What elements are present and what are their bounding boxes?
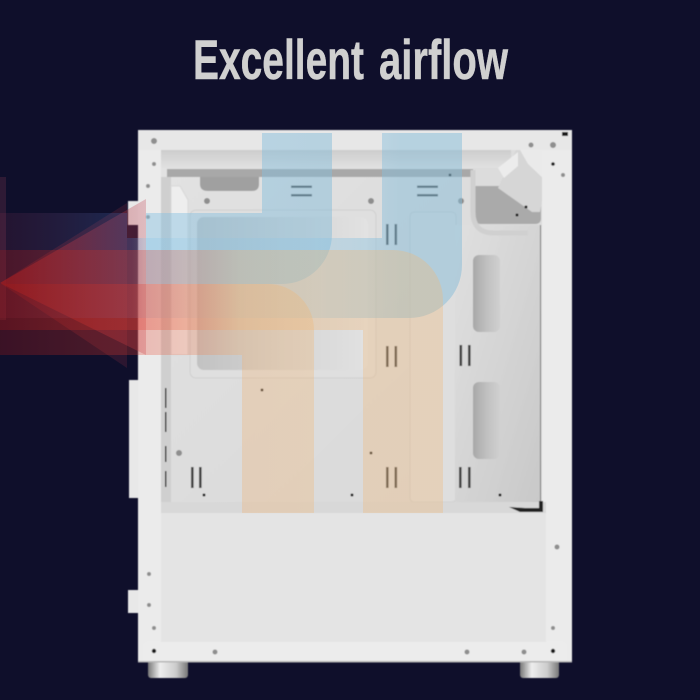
psu shroud: [161, 513, 546, 642]
airflow: blue top-right duct: [0, 133, 462, 318]
raised panel outline: [190, 210, 376, 378]
case feet: [148, 660, 559, 678]
airflow: orange bottom-right duct: [0, 250, 443, 513]
title: airflow: [379, 28, 508, 91]
right cable panel: [455, 225, 541, 514]
top rail shadow: [167, 169, 473, 177]
drive bay corner: [473, 150, 547, 233]
right inner edge: [540, 225, 541, 505]
top frame rail: [138, 130, 572, 150]
left frame: [138, 150, 161, 662]
main motherboard cutout: [197, 217, 368, 370]
motherboard tray raised strip: [410, 212, 456, 502]
top vent strip: [161, 150, 511, 169]
airflow: red arrowhead lower: [0, 203, 127, 368]
PC case illustration: [128, 130, 572, 678]
left fan mount: [171, 186, 188, 355]
psu shroud top: [161, 502, 546, 514]
case frame: [138, 130, 572, 662]
airflow: blue top-left duct: [146, 133, 332, 284]
screws: [146, 138, 565, 654]
cable holes: [473, 255, 500, 459]
bottom rail: [144, 642, 566, 662]
right frame: [542, 150, 572, 662]
airflow: red arrowhead upper: [0, 199, 146, 355]
side protrusions: [128, 201, 143, 613]
slot pairs: [191, 186, 471, 488]
left inner shadow: [161, 177, 171, 514]
black screws: [152, 132, 568, 653]
airflow: outside left arrow back strip: [0, 177, 6, 320]
title: Excellent: [193, 28, 364, 91]
dark corner at shroud: [509, 501, 543, 512]
airflow: orange bottom-left duct: [0, 284, 314, 513]
interior back panel: [161, 150, 542, 514]
left dashed slots: [165, 388, 166, 487]
top left cutout: [200, 177, 259, 191]
